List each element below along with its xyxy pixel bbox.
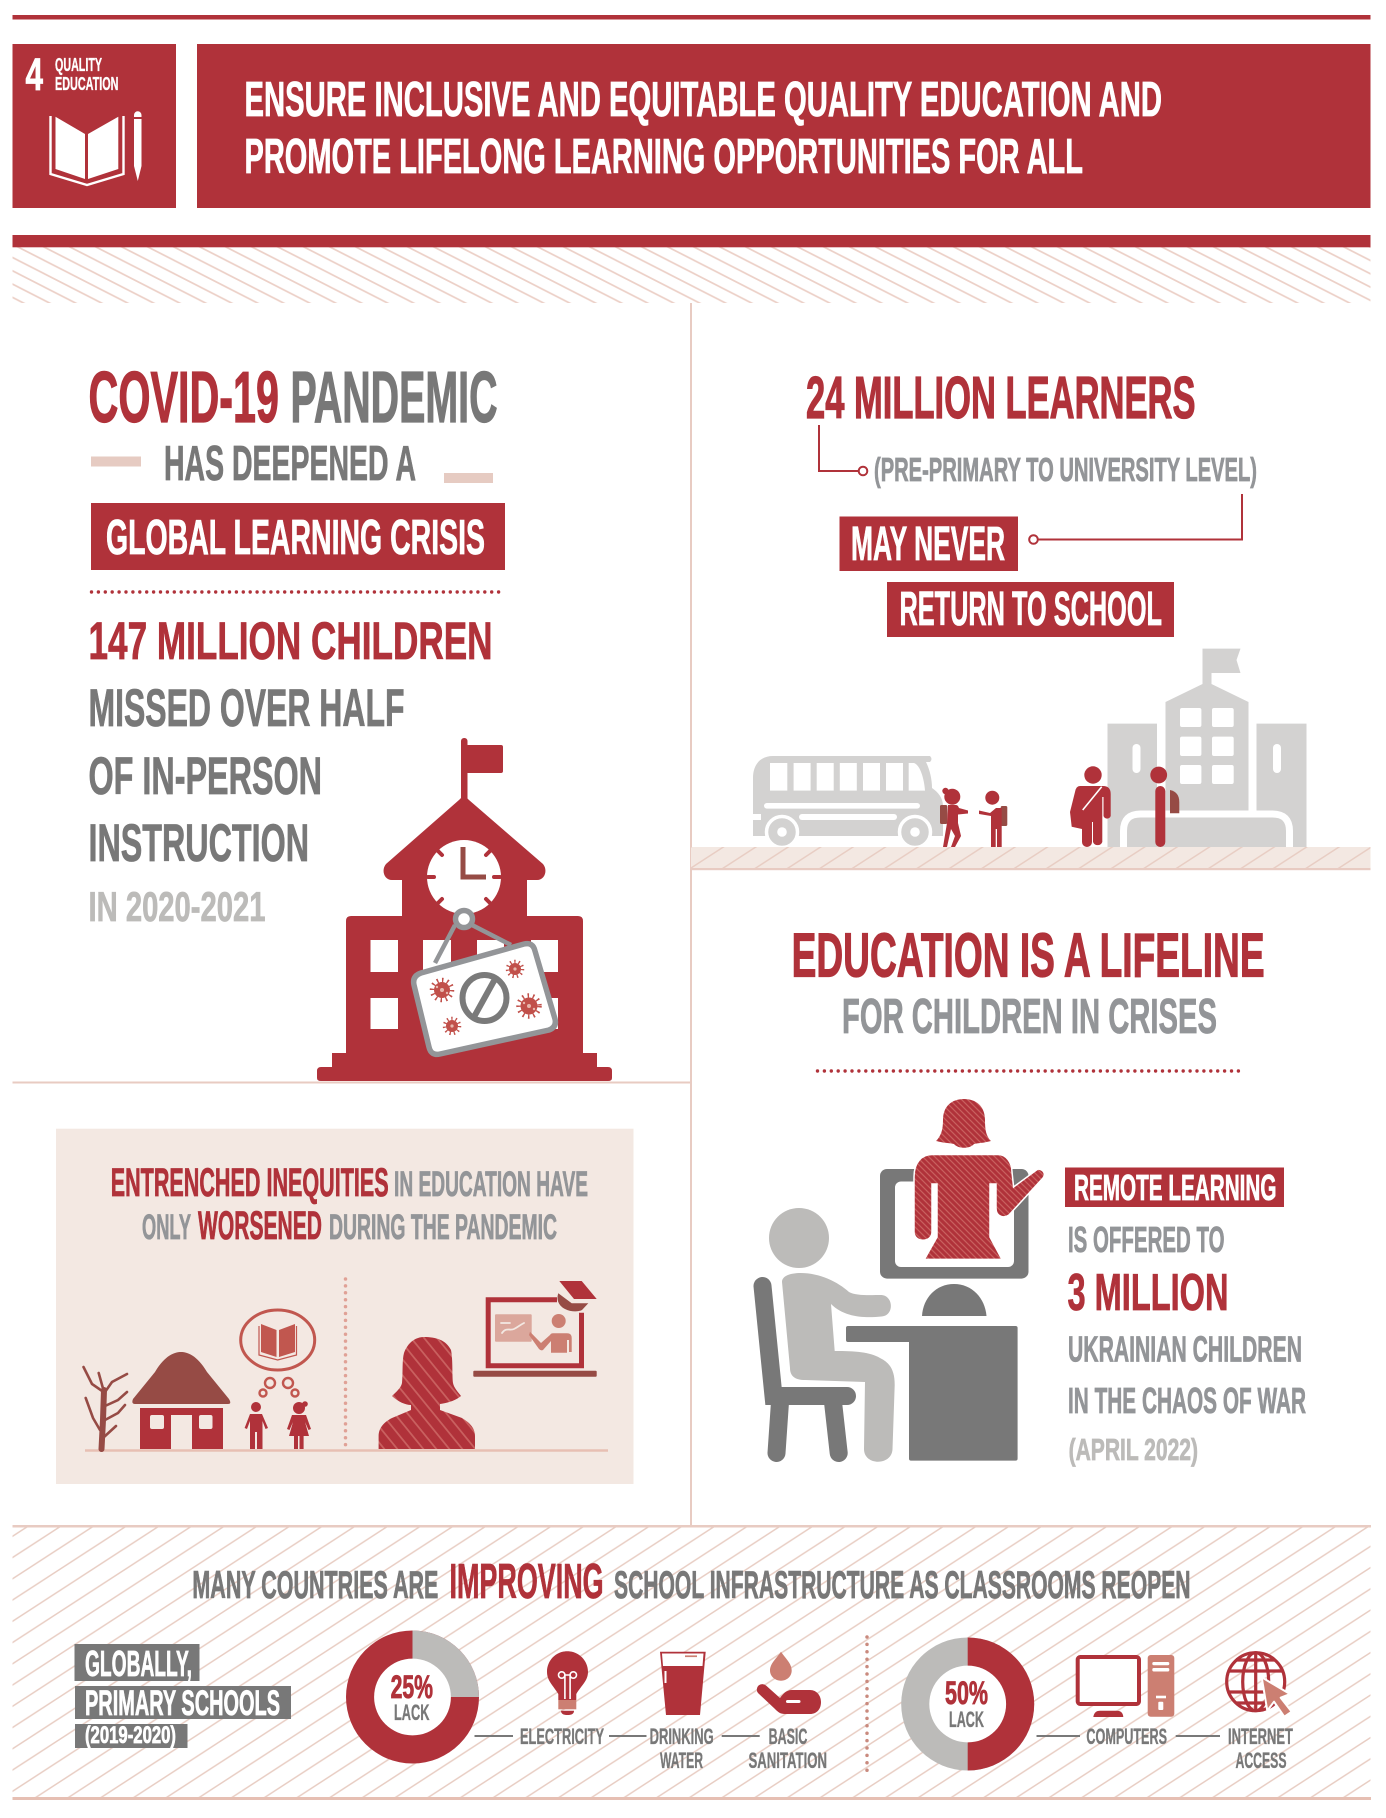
goal number: 4: [26, 49, 43, 100]
text: basic sanitation: [748, 1724, 827, 1773]
icon: adult with backpack: [1150, 767, 1179, 847]
text: is offered to: IS OFFERED TO: [1068, 1219, 1224, 1260]
desk: [846, 1326, 1018, 1461]
connectors: [474, 1735, 1220, 1737]
label: may never: [840, 516, 1018, 571]
statistic: 3 million: 3 MILLION: [1068, 1264, 1228, 1322]
icon: laptop with online class: [473, 1281, 597, 1377]
computer monitor: [880, 1169, 1028, 1316]
value: 25%: [391, 1669, 433, 1705]
icon: remote learning scene: [762, 1099, 1044, 1462]
icon: bare tree: [84, 1367, 127, 1449]
text: basic sanitation: SANITATION: [748, 1748, 827, 1773]
heading: IMPROVING: [450, 1554, 604, 1609]
icon: child with backpack, girl: [940, 788, 968, 847]
label: global learning crisis: [91, 503, 505, 570]
icon: girl: [287, 1401, 311, 1449]
text: drinking water: WATER: [660, 1748, 703, 1773]
icon: adult with satchel: [1070, 766, 1111, 847]
panel: education is a lifeline: [762, 922, 1306, 1467]
heading lines: IN EDUCATION HAVE: [394, 1165, 588, 1204]
heading: [192, 1554, 1190, 1609]
text: drinking water: DRINKING: [650, 1724, 714, 1749]
panel: entrenched inequities: [56, 1129, 634, 1484]
connector: [819, 425, 867, 475]
label: remote learning: [1065, 1167, 1284, 1208]
statistic text: MISSED OVER HALF: [88, 679, 404, 738]
text: internet access: ACCESS: [1236, 1748, 1286, 1773]
student: [769, 1208, 895, 1462]
heading: MANY COUNTRIES ARE: [192, 1564, 438, 1607]
text: electricity: ELECTRICITY: [520, 1724, 604, 1749]
ground strip: [691, 847, 1370, 870]
label: primary schools: PRIMARY SCHOOLS: [85, 1684, 280, 1723]
text: drinking water: [650, 1724, 714, 1773]
caption: LACK: [394, 1700, 430, 1725]
text: internet access: [1228, 1724, 1293, 1773]
connector: [1029, 494, 1242, 544]
chair: [762, 1286, 847, 1453]
label: return to school: RETURN TO SCHOOL: [900, 583, 1162, 636]
statistic text: [88, 679, 404, 873]
icon: school building: [1108, 649, 1306, 847]
donut chart: 25 percent: [346, 1630, 479, 1764]
heading lines: DURING THE PANDEMIC: [329, 1208, 557, 1247]
icon: thought bubble with book: [241, 1310, 315, 1396]
sign: [414, 910, 555, 1054]
top rule: [12, 15, 1370, 20]
accent dash right: [444, 473, 493, 483]
icon: school bus: [753, 756, 943, 848]
subheading: HAS DEEPENED A: [164, 436, 416, 491]
label: may never: MAY NEVER: [851, 518, 1005, 571]
icon: glass of water: [660, 1652, 706, 1715]
heading lines: WORSENED: [198, 1204, 322, 1248]
text: ukrainian children: [1068, 1328, 1306, 1421]
panel: global learning crisis: [88, 357, 612, 1081]
panel: school infrastructure: [12, 1525, 1371, 1800]
icon: globe and cursor: [1227, 1653, 1292, 1717]
label: globally: [74, 1643, 200, 1684]
panel: 24 million learners: [691, 364, 1370, 870]
label: primary schools: [75, 1684, 291, 1723]
heading lines: ONLY: [142, 1208, 191, 1247]
goal name: [55, 55, 118, 94]
icon: house: [132, 1352, 230, 1449]
text: computers: COMPUTERS: [1086, 1724, 1167, 1749]
icon: child with backpack, boy: [979, 791, 1007, 847]
icon: girl silhouette with hatched fill: [379, 1337, 475, 1449]
text: internet access: INTERNET: [1228, 1724, 1293, 1749]
heading lines: ENTRENCHED INEQUITIES: [111, 1161, 389, 1205]
label: global learning crisis: GLOBAL LEARNING CRISIS: [106, 510, 485, 565]
icon: closed school: [317, 738, 612, 1081]
statistic: 147 million children: 147 MILLION CHILDREN: [88, 612, 492, 671]
label: return to school: [887, 582, 1174, 637]
heading: covid-19 pandemic: COVID-19: [88, 357, 279, 438]
caption: LACK: [949, 1707, 984, 1732]
SDG 4 goal tile: [12, 44, 176, 208]
statistic text: INSTRUCTION: [88, 814, 309, 873]
statistic text: OF IN-PERSON: [88, 747, 322, 806]
date: (APRIL 2022): [1069, 1432, 1198, 1467]
goal name: EDUCATION: [55, 74, 118, 94]
donut chart: 50 percent: [901, 1638, 1034, 1770]
goal name: QUALITY: [55, 55, 102, 75]
icon: water drop and hand: [757, 1652, 821, 1714]
header band with hatching: [12, 235, 1370, 303]
heading: covid-19 pandemic: PANDEMIC: [290, 357, 498, 438]
date: IN 2020-2021: [88, 883, 266, 930]
layout dividers: [12, 303, 691, 1526]
icon: desktop computer: [1078, 1655, 1174, 1717]
value: 50%: [945, 1675, 988, 1711]
goal banner: [197, 44, 1370, 208]
accent dash left: [91, 456, 141, 466]
label: globally: GLOBALLY,: [85, 1643, 192, 1684]
icon: boy: [245, 1402, 268, 1449]
text: basic sanitation: BASIC: [769, 1724, 808, 1749]
teacher on screen: [914, 1099, 1044, 1259]
icon: book and pencil: [50, 111, 142, 185]
label: years: (2019-2020): [85, 1722, 176, 1749]
heading lines: [111, 1161, 588, 1248]
icon: light bulb: [547, 1651, 588, 1715]
icon: graduation cap: [558, 1281, 597, 1311]
